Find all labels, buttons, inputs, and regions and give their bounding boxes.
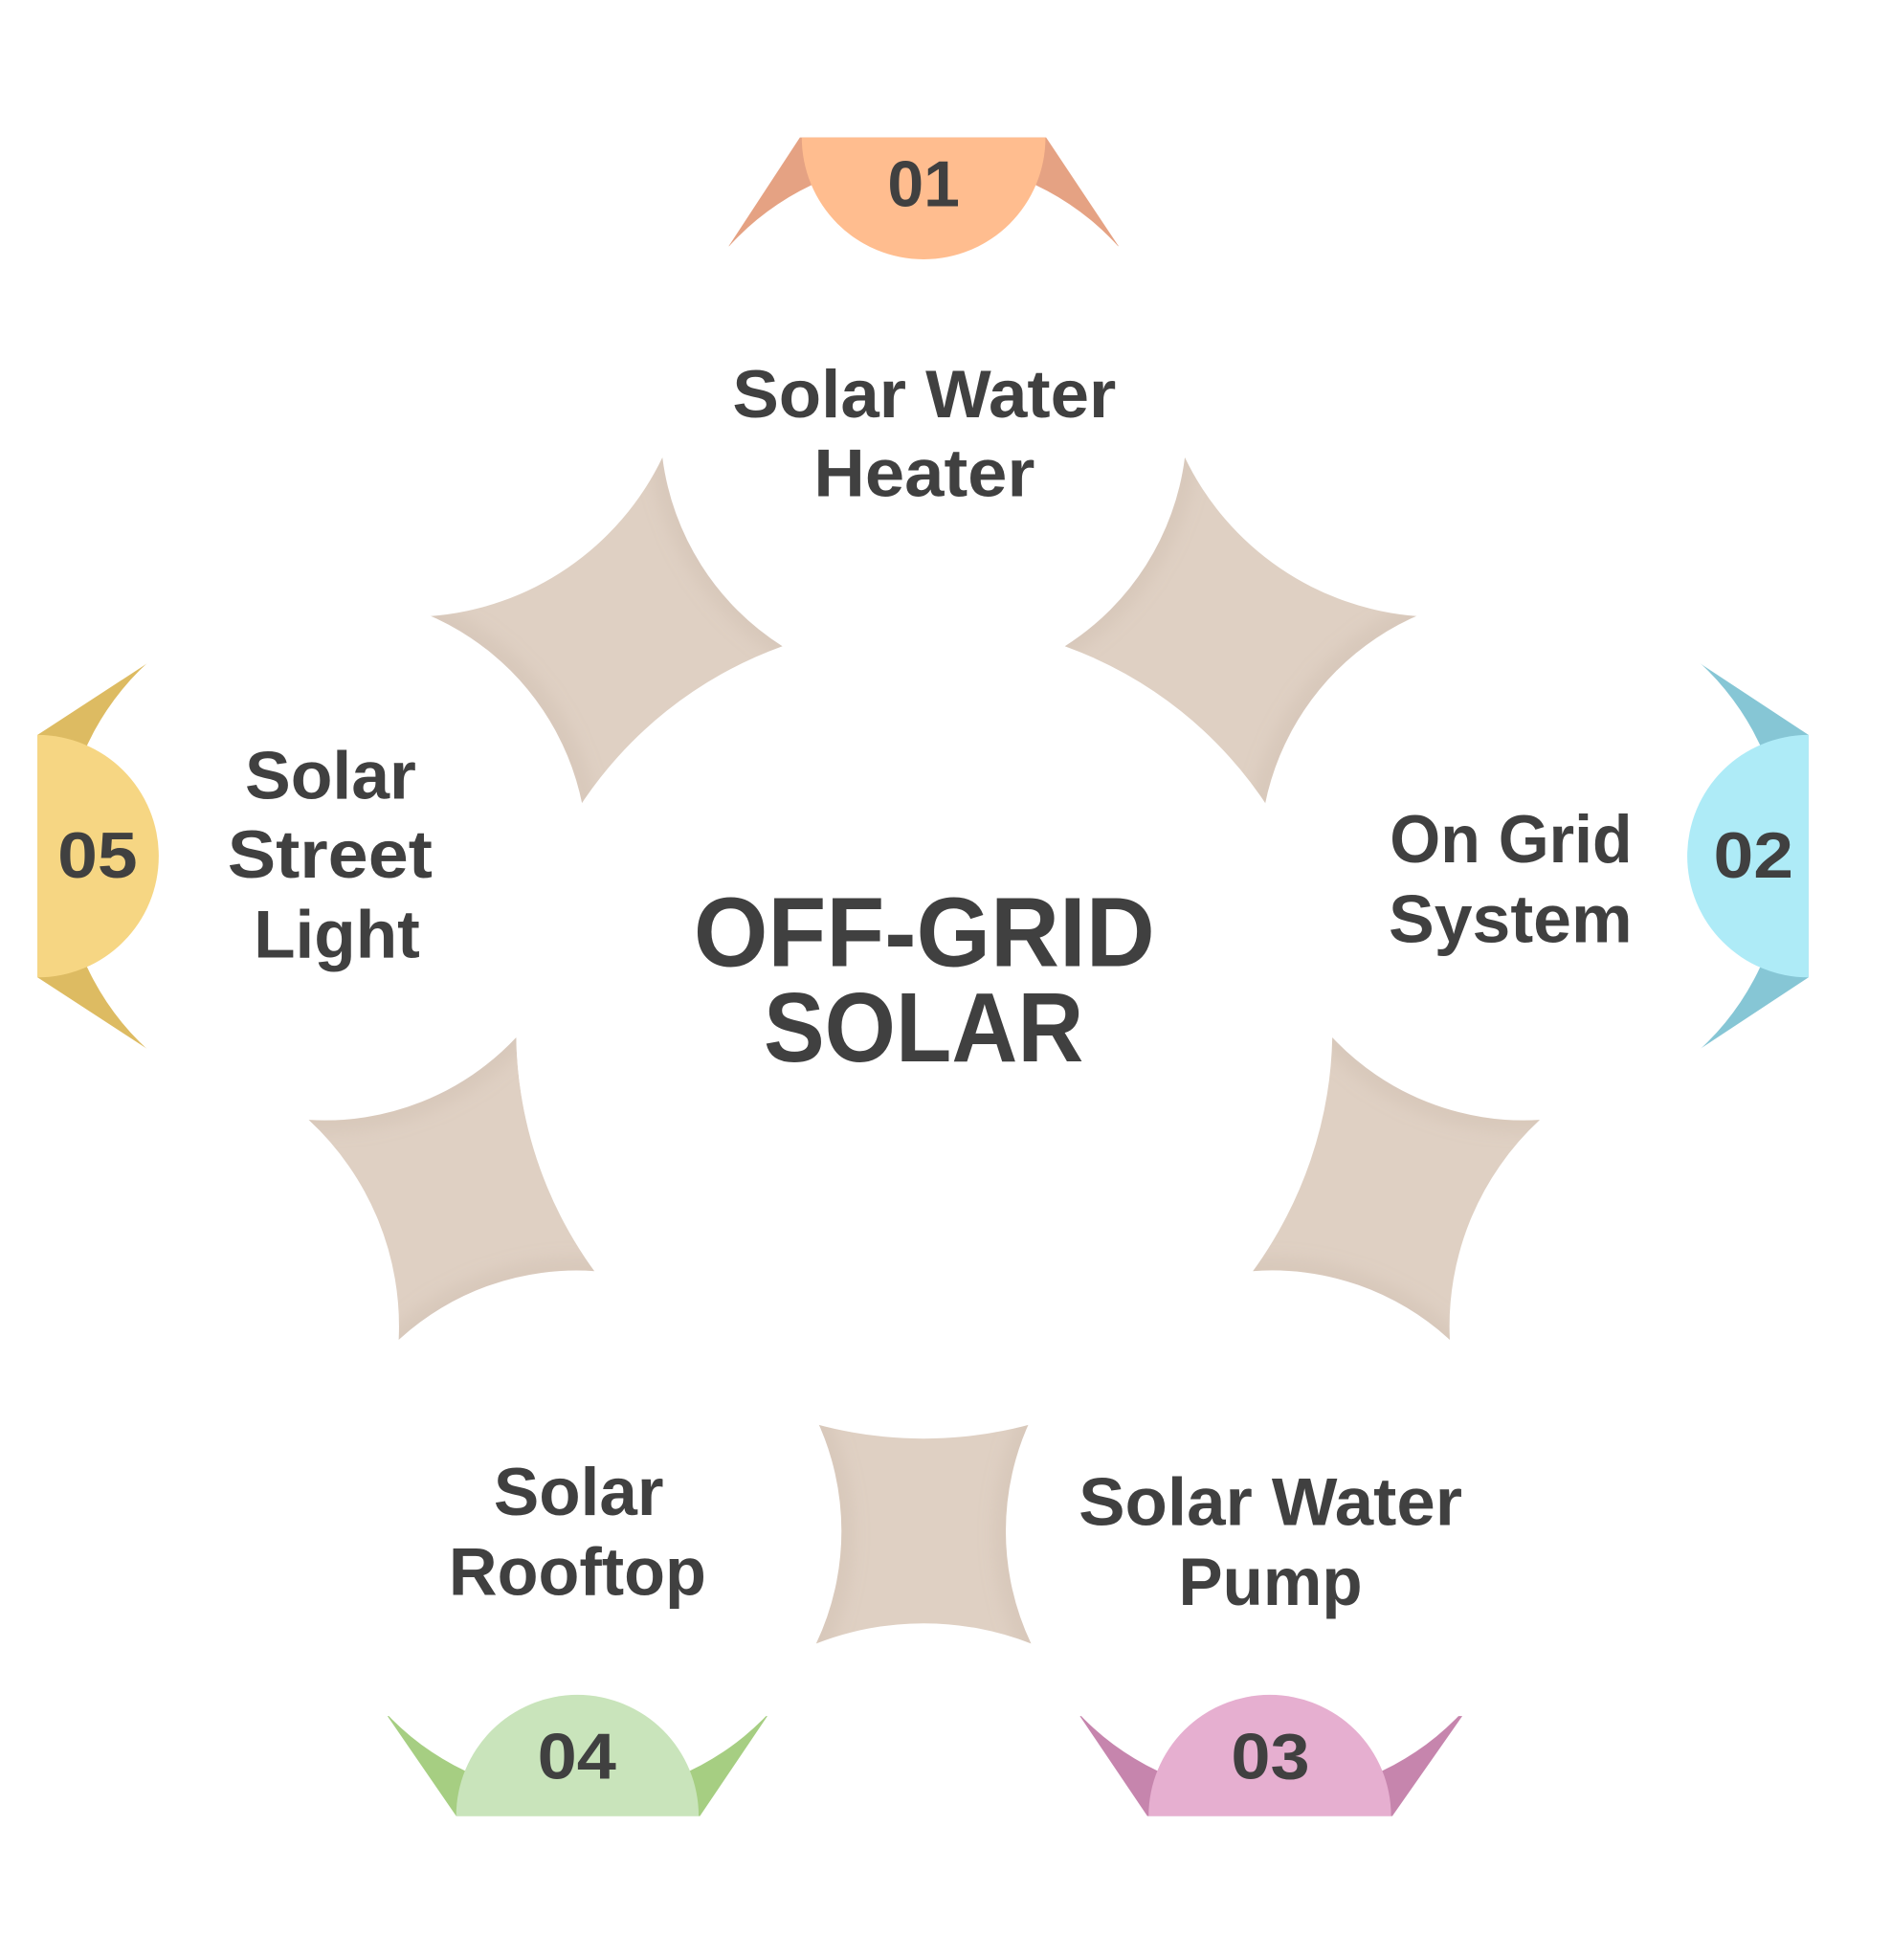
panel: Solar Street Light circle	[62, 593, 588, 1119]
badge wings: 05	[37, 662, 148, 1050]
badge 03: 03	[1231, 1721, 1310, 1793]
label: Solar Street Light: Light	[254, 896, 420, 971]
badge 01: 01	[887, 148, 960, 220]
panel: Solar Water Heater circle	[661, 160, 1186, 685]
title: OFF-GRID	[694, 878, 1155, 988]
connector: bottom star	[816, 1418, 1031, 1643]
badge 01	[802, 138, 1045, 259]
label: Solar Rooftop	[449, 1454, 706, 1609]
connector: top left star	[430, 457, 783, 810]
label: On Grid System	[1389, 801, 1633, 957]
badge 02: 02	[1714, 820, 1793, 892]
panel: Solar Water Pump circle	[1008, 1271, 1532, 1796]
label: Solar Water Heater: Heater	[813, 434, 1034, 510]
label: Solar Water Pump: Solar Water	[1079, 1463, 1462, 1539]
label: Solar Street Light: Solar	[245, 738, 416, 813]
badge wings: 01	[728, 138, 1119, 246]
label: Solar Water Pump: Pump	[1179, 1544, 1363, 1619]
label: On Grid System: On Grid	[1390, 801, 1633, 877]
badge 02	[1687, 735, 1809, 978]
badge 04: 04	[538, 1721, 616, 1793]
central circle	[516, 624, 1331, 1438]
label: Solar Water Heater: Solar Water	[732, 356, 1116, 432]
badge wings: 03	[1079, 1716, 1462, 1816]
badge wings: 04	[388, 1716, 768, 1816]
label: Solar Street Light: Street	[228, 816, 433, 892]
title: SOLAR	[764, 972, 1083, 1082]
panel: Solar Rooftop circle	[315, 1271, 840, 1796]
badge 04	[456, 1694, 699, 1816]
label: Solar Rooftop: Solar	[494, 1454, 663, 1529]
badge 03	[1148, 1694, 1391, 1816]
label: Solar Rooftop: Rooftop	[449, 1533, 706, 1609]
label: Solar Water Heater	[732, 356, 1116, 510]
connector: lower left star	[309, 1037, 595, 1340]
panel: On Grid System circle	[1259, 593, 1785, 1119]
connector stars	[309, 457, 1540, 1643]
badge wings: 02	[1699, 662, 1809, 1050]
label: Solar Street Light	[228, 738, 433, 971]
title	[694, 878, 1155, 1082]
badge 05: 05	[57, 820, 138, 892]
connector edge shading	[60, 158, 1788, 1798]
connector: top right star	[1065, 457, 1417, 810]
label: Solar Water Pump	[1079, 1463, 1462, 1619]
connector: lower right star	[1253, 1037, 1540, 1340]
badge 05	[37, 735, 159, 978]
label: On Grid System: System	[1389, 881, 1633, 957]
